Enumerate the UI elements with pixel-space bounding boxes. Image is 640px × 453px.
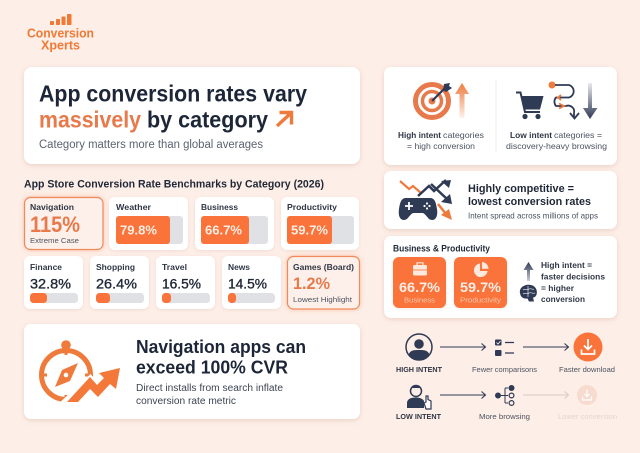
flow: low intent [396, 385, 617, 421]
callout body: conversion rate metric [136, 396, 236, 407]
competitive heading: lowest conversion rates [468, 196, 591, 208]
card: Navigation: Navigation [30, 202, 74, 212]
text: high intent: categories [443, 130, 484, 140]
section heading: benchmarks: App Store Conversion Rate Benchmarks by Category (2026) [24, 178, 324, 190]
tile: Productivity: 59.7% [460, 280, 501, 295]
card: Games (Board): 1.2% [293, 275, 330, 293]
card: Productivity [281, 197, 359, 250]
card: Finance [24, 256, 83, 309]
title: App conversion rates vary [39, 80, 307, 106]
text: faster decisions: conversion [541, 294, 585, 304]
panel heading: Business & Productivity [393, 244, 490, 254]
subtitle: Category matters more than global averages [39, 139, 263, 151]
logo: ConversionXperts: Conversion [27, 26, 94, 40]
card: Shopping: 26.4% [96, 276, 137, 292]
title: massively [39, 106, 141, 132]
card: Weather: 79.8% [120, 224, 157, 238]
card: Travel: Travel [162, 262, 187, 272]
card: Games (Board) [288, 256, 360, 309]
card: Navigation: 115% [30, 212, 80, 237]
text: faster decisions: = higher [541, 283, 575, 293]
icon: brain [520, 285, 537, 302]
card: News [222, 256, 281, 309]
panel: intent comparison [384, 67, 617, 165]
label: more browsing: More browsing [479, 412, 530, 421]
title [39, 80, 307, 132]
tile: Business [393, 257, 446, 308]
text: faster decisions: faster decisions [541, 272, 605, 282]
callout heading [136, 336, 306, 378]
card: Productivity: Productivity [287, 202, 337, 212]
icon: high intent person [406, 334, 432, 360]
callout body: Direct installs from search inflate [136, 383, 283, 394]
icon: shopping cart [516, 92, 544, 119]
callout body [136, 383, 283, 407]
label: fewer comparisons: Fewer comparisons [472, 365, 537, 374]
tile: Business: Business [404, 296, 435, 304]
icon: download button [574, 332, 602, 362]
card: Travel: 16.5% [162, 276, 201, 292]
icon: up arrow [524, 262, 534, 281]
text: high intent: High intent [398, 130, 441, 140]
text: low intent: categories = [554, 130, 602, 140]
panel: headline [24, 67, 360, 164]
card: Weather: Weather [116, 202, 152, 212]
panel: navigation callout [24, 324, 360, 419]
card: Business [195, 197, 274, 250]
competitive heading [468, 183, 591, 208]
card: Business: 66.7% [205, 224, 242, 238]
icon: branching options [495, 385, 514, 405]
icon: checklist [495, 340, 514, 356]
logo: ConversionXperts: Xperts [41, 38, 80, 52]
card: Travel [156, 256, 215, 309]
icon: faded download [577, 385, 597, 405]
icon: target with dart [416, 83, 452, 118]
label: high intent: HIGH INTENT [396, 365, 442, 374]
icon: down arrow [583, 83, 598, 119]
text: faster decisions [541, 260, 605, 304]
arrow [440, 392, 486, 398]
panel: competitive games [384, 171, 617, 229]
label: lower conversion: Lower conversion [558, 412, 617, 421]
text: low intent: discovery-heavy browsing [506, 141, 607, 151]
arrow [523, 344, 568, 350]
card: Shopping [90, 256, 149, 309]
icon: up arrow [455, 83, 469, 118]
card: Business: Business [201, 202, 238, 212]
text: low intent: Low intent [510, 130, 552, 140]
card: Navigation: Extreme Case [30, 236, 79, 245]
icon: winding browsing path [548, 82, 579, 118]
icon: up-right arrow [277, 112, 292, 126]
text: low intent [506, 130, 607, 151]
flow: high intent [396, 332, 615, 374]
card: Finance: 32.8% [30, 276, 71, 292]
card: Shopping: Shopping [96, 262, 135, 272]
icon: low intent person [407, 385, 431, 409]
title: by category [147, 106, 268, 132]
panel: business and productivity [384, 236, 617, 318]
text: high intent: = high conversion [407, 141, 475, 151]
competitive heading: Highly competitive = [468, 183, 574, 195]
text: faster decisions: High intent = [541, 260, 592, 270]
icon: gamepad with trend arrows [399, 180, 452, 220]
logo: ConversionXperts [27, 14, 94, 52]
icon: compass with rising arrow [42, 340, 120, 406]
callout heading: exceed 100% CVR [136, 356, 288, 378]
card: News: 14.5% [228, 276, 267, 292]
label: faster download: Faster download [559, 365, 615, 374]
callout heading: Navigation apps can [136, 336, 306, 357]
card: Productivity: 59.7% [291, 224, 328, 238]
card: Finance: Finance [30, 262, 62, 272]
competitive body: Intent spread across millions of apps [468, 210, 598, 220]
arrow: faded [523, 392, 568, 398]
arrow [440, 344, 486, 350]
card: Games (Board): Lowest Highlight [293, 295, 353, 304]
card: Navigation [24, 198, 103, 250]
tile: Business: 66.7% [399, 280, 440, 295]
card: News: News [228, 262, 250, 272]
card: Games (Board): Games (Board) [293, 262, 354, 272]
card: Weather [109, 197, 188, 250]
tile: Productivity [454, 257, 507, 308]
tile: Productivity: Productivity [460, 296, 501, 304]
text: high intent [398, 130, 484, 151]
label: low intent: LOW INTENT [396, 412, 441, 421]
